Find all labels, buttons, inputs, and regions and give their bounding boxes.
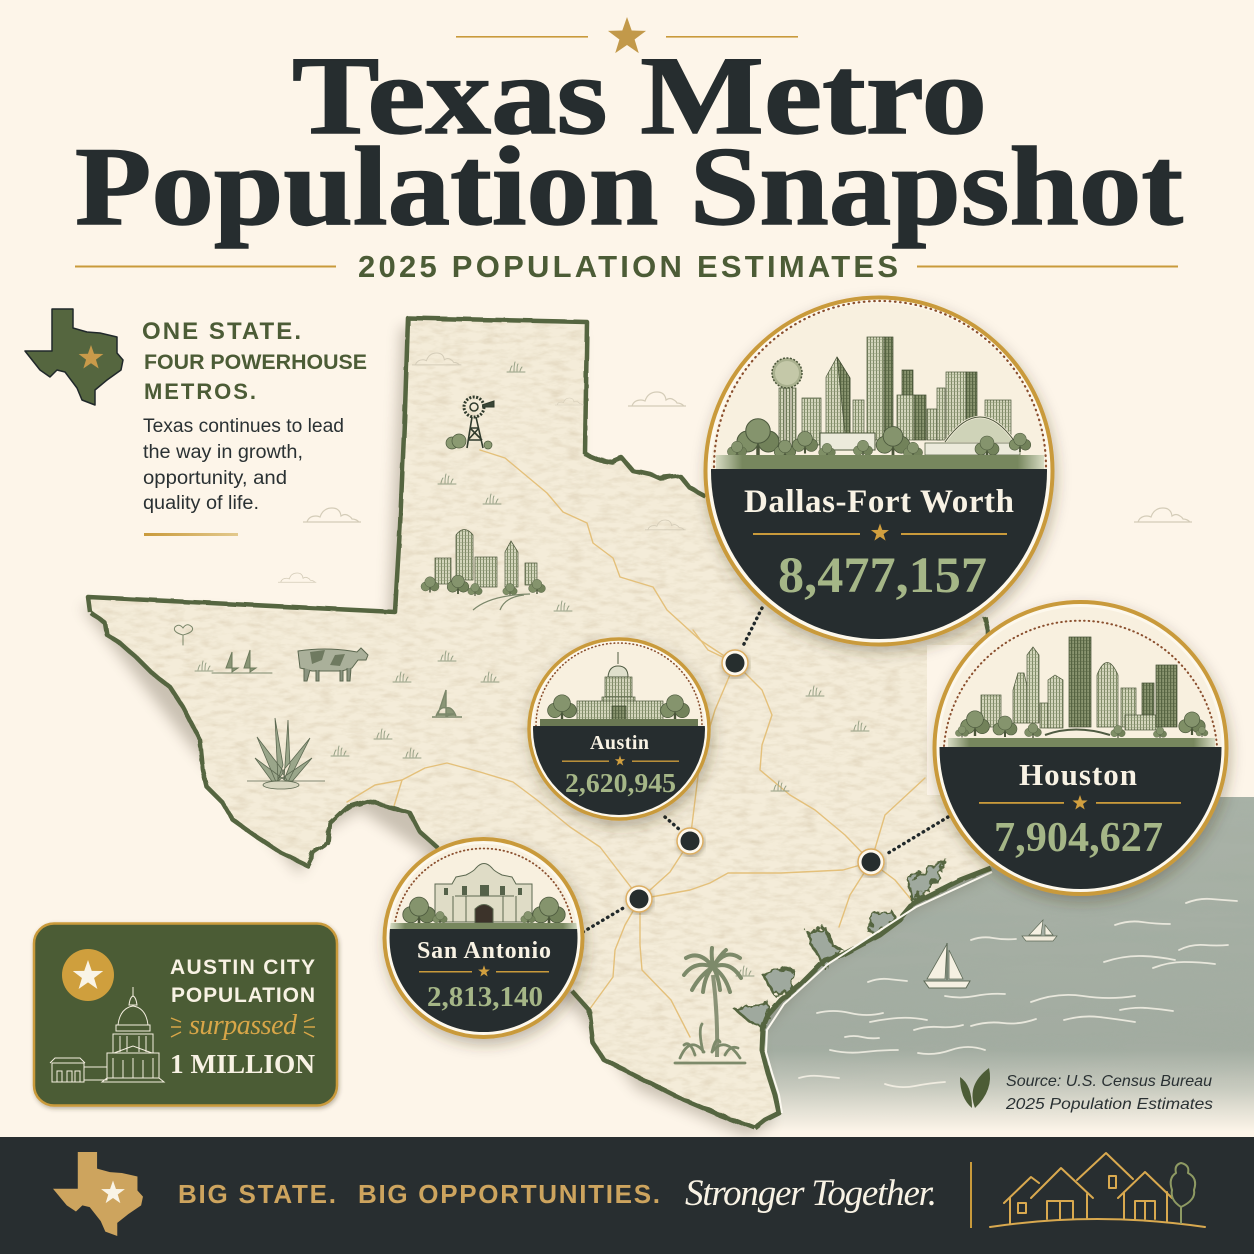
callout text: surpassed [189, 1010, 298, 1041]
intro body text: the way in growth, [143, 442, 303, 463]
intro heading: ONE STATE. [142, 318, 301, 345]
pin: San Antonio [626, 886, 652, 912]
skyline: Houston [930, 637, 1230, 897]
roads [347, 450, 925, 1037]
intro body text: quality of life. [143, 493, 259, 514]
label and value: 2,813,140 [427, 981, 543, 1013]
callout text: AUSTIN CITY [170, 956, 315, 979]
pin: Austin [677, 828, 703, 854]
background patch east of map [927, 645, 1007, 795]
icon: gold Texas [53, 1152, 143, 1236]
icon: Texas state with star [25, 309, 123, 405]
intro panel [25, 309, 367, 536]
footer band [0, 1137, 1254, 1254]
icon: small skyline [421, 530, 545, 610]
coastline [755, 868, 991, 1128]
badge: Dallas-Fort Worth [700, 298, 1060, 649]
waves [799, 899, 1237, 1087]
icon: houses [990, 1153, 1205, 1227]
subtitle: 2025 POPULATION ESTIMATES [358, 249, 898, 284]
label and value: San Antonio [417, 938, 551, 964]
connector: Austin [665, 817, 680, 830]
Texas map [81, 318, 1007, 1137]
label and value: 7,904,627 [994, 815, 1163, 861]
icon: cow [298, 648, 368, 681]
skyline: Dallas [700, 337, 1060, 649]
map land [88, 318, 1000, 1128]
callout: Austin city population [34, 924, 337, 1106]
footer slogan: BIG OPPORTUNITIES. [358, 1179, 660, 1209]
source text [1005, 1073, 1213, 1113]
sailboat large [924, 943, 970, 988]
icon: gold star medallion [62, 949, 114, 1001]
map shadow [81, 327, 984, 1137]
icon: palm tree [675, 948, 745, 1063]
intro heading: FOUR POWERHOUSE [144, 351, 367, 374]
icon: capitol line art [50, 987, 164, 1082]
label and value [562, 732, 679, 798]
label and value: Dallas-Fort Worth [744, 484, 1014, 520]
footer script tagline: Stronger Together. [685, 1173, 937, 1214]
connector: Houston [885, 817, 948, 855]
connector: San Antonio [583, 907, 625, 932]
source text: Source: U.S. Census Bureau [1006, 1073, 1212, 1090]
badge: Austin [528, 639, 712, 826]
coastline bays [736, 862, 945, 1028]
map border: rivers [90, 454, 990, 1128]
connector: Dallas-Fort Worth [742, 608, 762, 648]
title ornament: star and rules [456, 17, 798, 53]
intro heading [142, 318, 367, 404]
label and value: 2,620,945 [565, 768, 676, 798]
title line two: Population Snapshot [75, 125, 1183, 249]
title line one: Texas Metro [292, 34, 987, 158]
source text: 2025 Population Estimates [1005, 1096, 1213, 1113]
badge: San Antonio [384, 839, 585, 1041]
pin: Dallas-Fort Worth [722, 650, 748, 676]
icon: windmill [446, 397, 494, 449]
skyline: Capitol [533, 652, 705, 815]
callout text: POPULATION [171, 984, 315, 1007]
map border: straight edges [88, 318, 587, 612]
icon: agave [247, 718, 325, 789]
badge: Houston [930, 602, 1230, 897]
skyline: Alamo [390, 863, 578, 1032]
icon: leaf [960, 1068, 990, 1108]
icon: desert plants [174, 353, 869, 976]
intro body text: opportunity, and [143, 468, 287, 489]
label and value [417, 938, 551, 1013]
pin: Houston [858, 849, 884, 875]
label and value: Austin [590, 732, 649, 754]
label and value: Houston [1019, 757, 1137, 792]
title block [75, 17, 1183, 284]
label and value [744, 484, 1014, 604]
source note [960, 1068, 1213, 1113]
footer slogan [178, 1179, 660, 1209]
gulf water [740, 797, 1254, 1137]
footer slogan: BIG STATE. [178, 1179, 336, 1209]
sailboat small [1022, 920, 1057, 941]
coast highlight [766, 872, 992, 1113]
label and value [979, 757, 1181, 861]
intro body text: Texas continues to lead [143, 416, 344, 437]
callout text: 1 MILLION [170, 1049, 315, 1079]
intro body text [143, 416, 344, 514]
label and value: 8,477,157 [778, 548, 987, 604]
intro heading: METROS. [144, 379, 256, 404]
callout text [170, 956, 315, 1079]
sky clouds [278, 392, 1192, 582]
